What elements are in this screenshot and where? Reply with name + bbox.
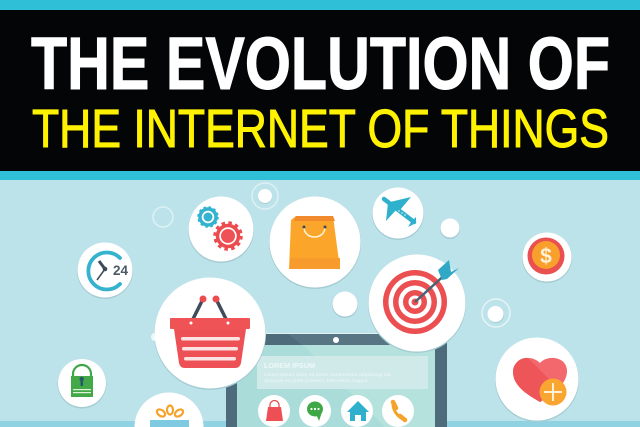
icon: shopping bag: [269, 196, 361, 289]
icon: dollar coin: [522, 232, 572, 283]
app icon: home: [341, 395, 373, 427]
title: [31, 22, 610, 159]
icon: basket: [151, 278, 266, 390]
bubble: small white right: [440, 218, 460, 239]
header band: [0, 0, 640, 180]
icon: dollar coin: $: [540, 245, 552, 268]
icon: padlock: [58, 359, 106, 408]
icon: clock 24: [77, 242, 133, 299]
app icon: chat: [299, 395, 331, 427]
icon: gift: [134, 392, 204, 427]
decorative ring: right: [482, 299, 510, 327]
icon: heart plus: [495, 338, 579, 422]
icon: clock 24: 24: [113, 263, 129, 278]
icon: airplane: [372, 188, 424, 240]
icon: gears: [188, 196, 254, 263]
text panel: [257, 356, 428, 389]
icon: target with arrow: [368, 254, 466, 353]
app icon: phone: [382, 395, 414, 427]
text panel: Lorem ipsum dolor sit amet, consectetur adipiscing elit.: [264, 372, 392, 377]
text panel: Quisque eu justo posuere, bibendum magna.: [264, 378, 369, 383]
text panel: LOREM IPSUM: [264, 361, 315, 370]
app icon: bag: [258, 395, 290, 427]
decorative ring: small: [153, 207, 173, 227]
decorative ring: top: [252, 183, 278, 209]
bottom strip: [0, 421, 640, 427]
laptop: [226, 333, 447, 427]
bubble: small white centre: [332, 292, 358, 318]
